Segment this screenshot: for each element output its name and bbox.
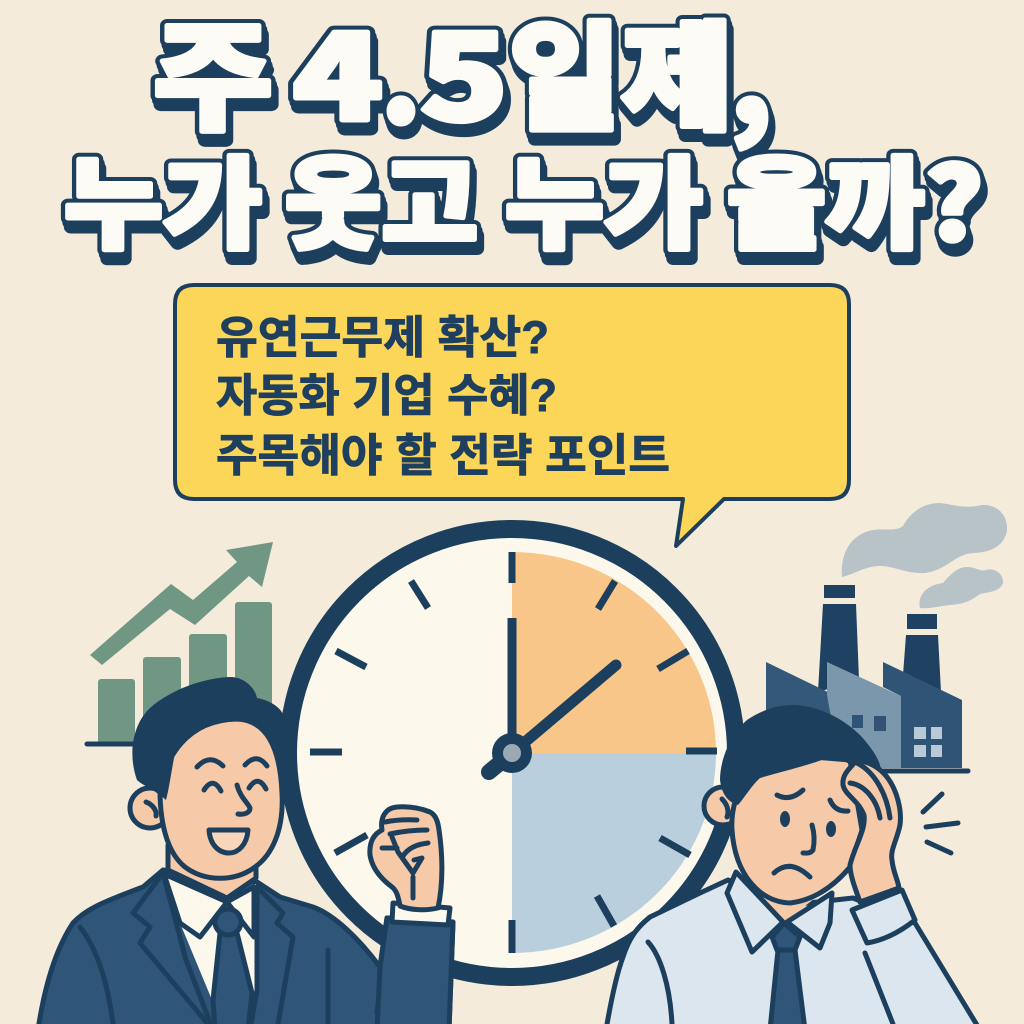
middle building <box>827 662 901 768</box>
nose <box>237 785 250 814</box>
stress marks <box>923 794 958 853</box>
clock face <box>288 529 736 977</box>
title line 2: 누가 <box>505 124 703 269</box>
clock hub <box>492 733 532 773</box>
speech bubble <box>175 285 849 546</box>
left building <box>766 662 838 760</box>
title line 2: 누가 <box>508 133 706 278</box>
title <box>64 0 986 278</box>
bubble shape <box>175 285 849 546</box>
white shirt <box>163 874 256 1024</box>
title line 2: 울까 <box>728 128 926 274</box>
right building <box>883 662 962 768</box>
hair <box>720 705 881 805</box>
title line 2: ? <box>925 124 983 269</box>
smiling eyes <box>204 781 266 791</box>
title line 2: 울까 <box>727 124 925 269</box>
rising arrow <box>90 542 273 665</box>
title line 2: 울까 <box>730 133 928 278</box>
smoke clouds <box>842 503 1007 608</box>
face <box>160 719 282 878</box>
title line 1 <box>153 0 775 163</box>
chart baseline <box>87 742 190 746</box>
title line 2 <box>64 124 986 278</box>
neck <box>168 845 256 898</box>
worried businessman <box>606 705 980 1024</box>
eyebrows <box>197 759 267 767</box>
open mouth <box>209 830 248 853</box>
bubble text: 유연근무제 확산? <box>216 312 549 363</box>
ear <box>704 787 742 825</box>
ear <box>130 788 170 828</box>
title line 2: 누가 <box>66 128 264 274</box>
raised sleeve and cuff <box>377 903 453 1024</box>
bubble text <box>216 312 670 481</box>
title line 2: ? <box>925 124 983 269</box>
neck <box>745 875 825 922</box>
bubble text: 주목해야 할 전략 포인트 <box>216 430 670 481</box>
icon: factory with smoke <box>766 503 1007 771</box>
clock hands <box>489 618 616 772</box>
suit creases <box>80 927 385 1024</box>
title line 2: ? <box>928 133 986 278</box>
factory baseline <box>880 768 968 774</box>
factory windows <box>852 715 942 757</box>
raised fist <box>370 807 442 910</box>
title line 2: ? <box>926 128 984 274</box>
cuff <box>852 890 915 943</box>
hand on head <box>843 760 900 902</box>
bubble text: 자동화 기업 수혜? <box>216 370 557 421</box>
collar <box>164 874 227 937</box>
chimneys <box>818 585 941 692</box>
face <box>732 755 862 903</box>
title line 2: 웃고 <box>285 124 478 269</box>
happy businessman <box>38 677 453 1024</box>
shirt body <box>606 880 980 1024</box>
title line 2: 누가 <box>67 133 265 278</box>
title line 2: 웃고 <box>286 128 480 274</box>
clock <box>288 529 736 977</box>
title line 2: 누가 <box>64 124 262 269</box>
title line 2: 웃고 <box>288 133 481 278</box>
title line 2: 누가 <box>505 124 703 269</box>
tie <box>213 909 252 1024</box>
blue quarter <box>512 753 716 953</box>
orange quarter <box>512 552 716 753</box>
clock ticks <box>310 552 717 953</box>
title line 2: 누가 <box>64 124 262 269</box>
chart bars <box>98 602 272 744</box>
frown <box>774 866 810 877</box>
nose <box>803 825 814 853</box>
collar <box>727 872 832 952</box>
title line 2: 울까 <box>727 124 925 269</box>
title line 2: 웃고 <box>285 124 478 269</box>
eyebrows <box>777 790 848 811</box>
hair <box>132 677 286 800</box>
worried eyes <box>780 811 836 837</box>
title line 2: 누가 <box>506 128 704 274</box>
lapels <box>133 873 213 1024</box>
tie <box>770 923 805 1024</box>
icon: growth bar chart with arrow <box>87 542 273 744</box>
suit body <box>38 870 453 1024</box>
shirt creases <box>648 942 893 1024</box>
